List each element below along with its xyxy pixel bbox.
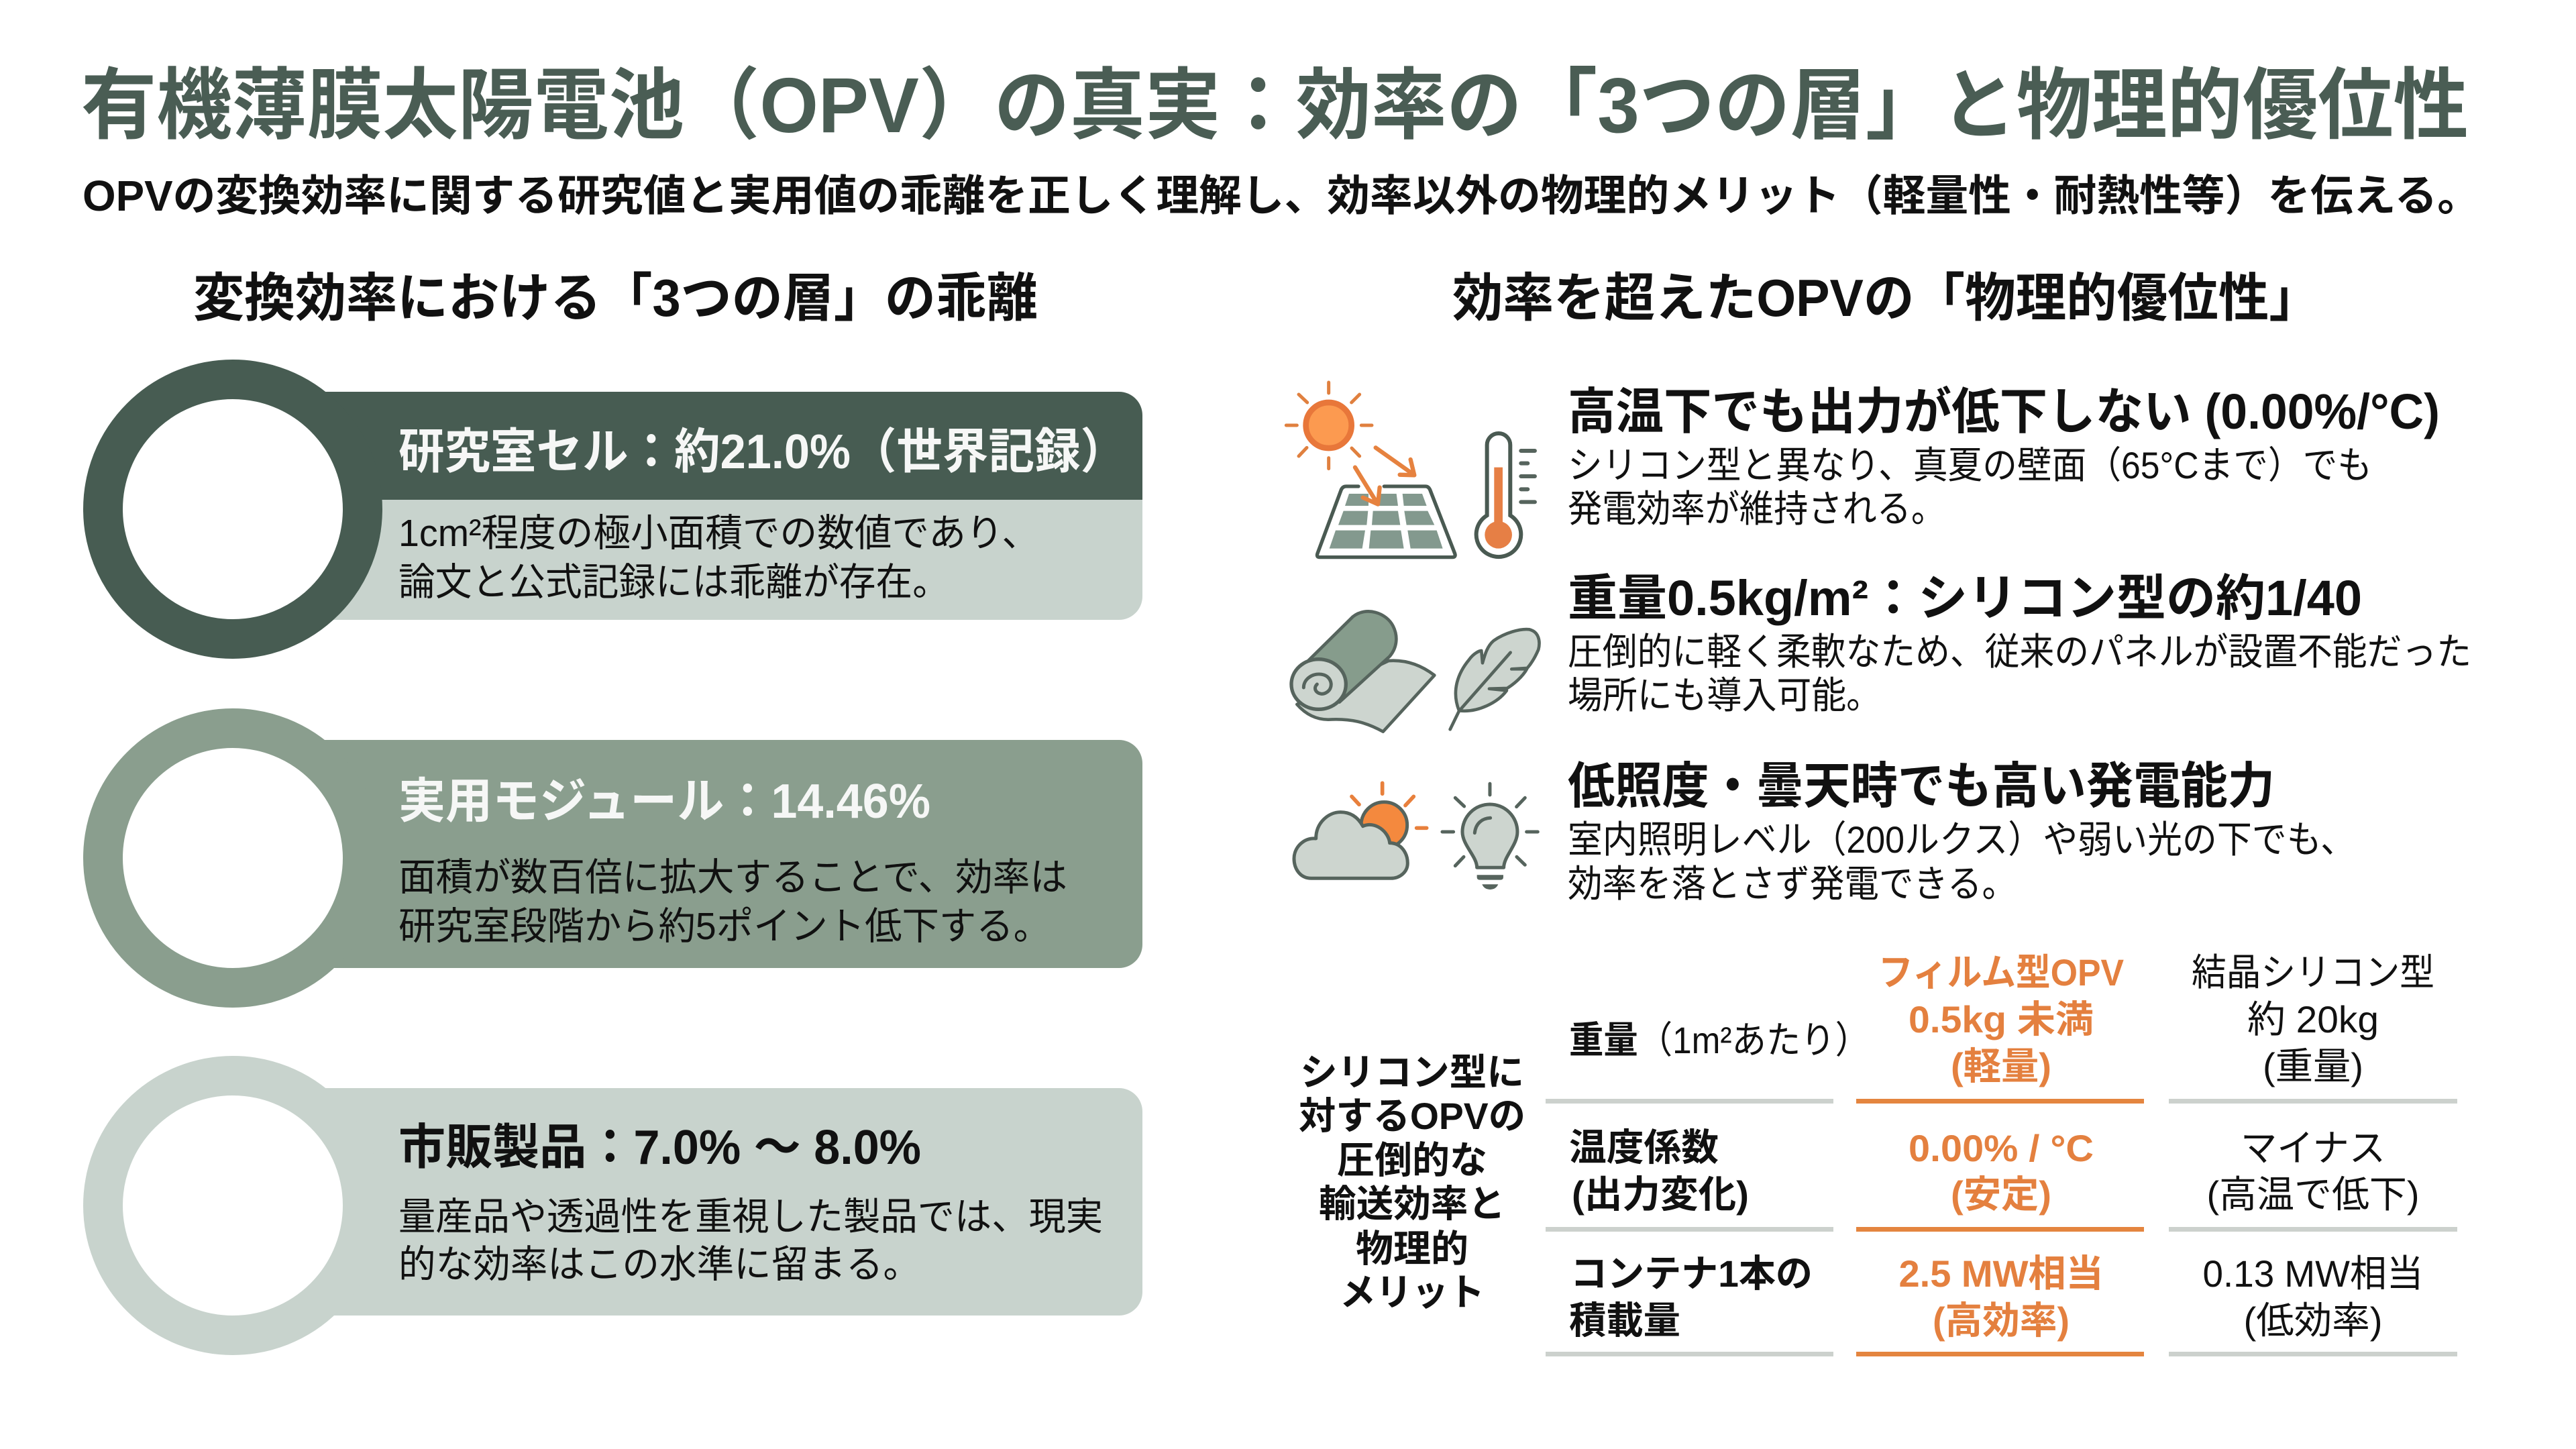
heading: right section: 効率を超えたOPVの「物理的優位性」 [1452, 268, 2320, 327]
subtitle: OPVの変換効率に関する研究値と実用値の乖離を正しく理解し、効率以外の物理的メリット（軽量性・耐熱性等）を伝える。 [83, 172, 2480, 220]
text: research cell description: 論文と公式記録には乖離が存在。 [398, 561, 949, 604]
text: high temperature merit: 発電効率が維持される。 [1568, 488, 1945, 530]
heading: left section: 変換効率における「3つの層」の乖離 [193, 268, 1038, 327]
text: lightweight merit: 重量0.5kg/m²：シリコン型の約1/40 [1568, 570, 2362, 626]
text: table side caption: シリコン型に [1300, 1051, 1524, 1093]
row: weight: 約 20kg [2247, 998, 2379, 1040]
text: practical module description: 研究室段階から約5ポイント低下する。 [398, 905, 1051, 948]
row: weight: 0.5kg 未満 [1909, 998, 2094, 1040]
text: low light merit: 低照度・曇天時でも高い発電能力 [1568, 758, 2275, 814]
row: container load: コンテナ1本の [1570, 1252, 1813, 1295]
row: container load [1546, 1252, 2457, 1356]
text: high temperature merit [1568, 384, 2440, 530]
row: temperature coefficient [1546, 1126, 2457, 1232]
row: container load: 2.5 MW相当 [1898, 1252, 2104, 1295]
row: temperature coefficient: (高温で低下) [2207, 1173, 2419, 1216]
icon: sun, solar panel and thermometer [1286, 382, 1535, 557]
panel: practical module layer [103, 729, 1142, 987]
title: 有機薄膜太陽電池（OPV）の真実：効率の「3つの層」と物理的優位性 [81, 62, 2469, 149]
text: commercial product description [398, 1195, 1103, 1286]
icon: cloud with sun and light bulb [1294, 783, 1538, 890]
text: table side caption: メリット [1340, 1271, 1485, 1313]
text: low light merit [1568, 758, 2355, 905]
text: table side caption [1299, 1051, 1525, 1313]
text: research cell description: 1cm²程度の極小面積での数値であり、 [398, 512, 1039, 555]
text: table side caption: 対するOPVの [1299, 1095, 1525, 1137]
panel: commercial product layer [103, 1076, 1142, 1335]
heading: research cell: 研究室セル：約21.0%（世界記録） [398, 425, 1126, 479]
text: low light merit: 室内照明レベル（200ルクス）や弱い光の下でも、 [1568, 818, 2355, 861]
row: weight: 重量（1m²あたり） [1569, 1019, 1870, 1061]
row: container load: 0.13 MW相当 [2203, 1252, 2423, 1295]
text: low light merit: 効率を落とさず発電できる。 [1568, 863, 2017, 905]
text: practical module description: 面積が数百倍に拡大することで、効率は [398, 856, 1067, 899]
icon: film roll and feather [1291, 611, 1539, 732]
text: high temperature merit: シリコン型と異なり、真夏の壁面（65°Cまで）でも [1568, 444, 2372, 486]
text: lightweight merit [1568, 570, 2471, 716]
text: commercial product description: 的な効率はこの水準に留まる。 [398, 1243, 920, 1286]
panel: research cell layer [103, 380, 1142, 639]
row: container load: (低効率) [2243, 1299, 2383, 1342]
row: temperature coefficient: (出力変化) [1572, 1173, 1749, 1216]
heading: practical module: 実用モジュール：14.46% [398, 775, 930, 828]
table: OPV versus silicon comparison [1546, 951, 2457, 1356]
text: lightweight merit: 圧倒的に軽く柔軟なため、従来のパネルが設置不能だった [1568, 631, 2471, 673]
text: high temperature merit: 高温下でも出力が低下しない (0.00%/°C) [1568, 384, 2440, 439]
row: weight [1546, 951, 2457, 1104]
text: table side caption: 物理的 [1356, 1228, 1468, 1270]
text: practical module description [398, 856, 1067, 948]
row: temperature coefficient: (安定) [1951, 1173, 2051, 1216]
row: weight: フィルム型OPV [1878, 951, 2124, 994]
row: container load: 積載量 [1569, 1299, 1680, 1342]
row: container load: (高効率) [1933, 1299, 2070, 1342]
row: weight: 結晶シリコン型 [2192, 951, 2434, 994]
row: weight: (軽量) [1951, 1045, 2051, 1087]
row: temperature coefficient: 0.00% / °C [1909, 1127, 2094, 1169]
row: temperature coefficient: 温度係数 [1569, 1126, 1719, 1169]
row: weight: (重量) [2263, 1045, 2363, 1087]
heading: commercial product: 市販製品：7.0% ～ 8.0% [398, 1121, 921, 1175]
text: table side caption: 輸送効率と [1319, 1183, 1505, 1225]
text: research cell description [398, 512, 1039, 604]
text: table side caption: 圧倒的な [1337, 1139, 1487, 1181]
row: temperature coefficient: マイナス [2241, 1127, 2385, 1169]
text: lightweight merit: 場所にも導入可能。 [1568, 674, 1881, 716]
text: commercial product description: 量産品や透過性を重視した製品では、現実 [398, 1195, 1103, 1238]
